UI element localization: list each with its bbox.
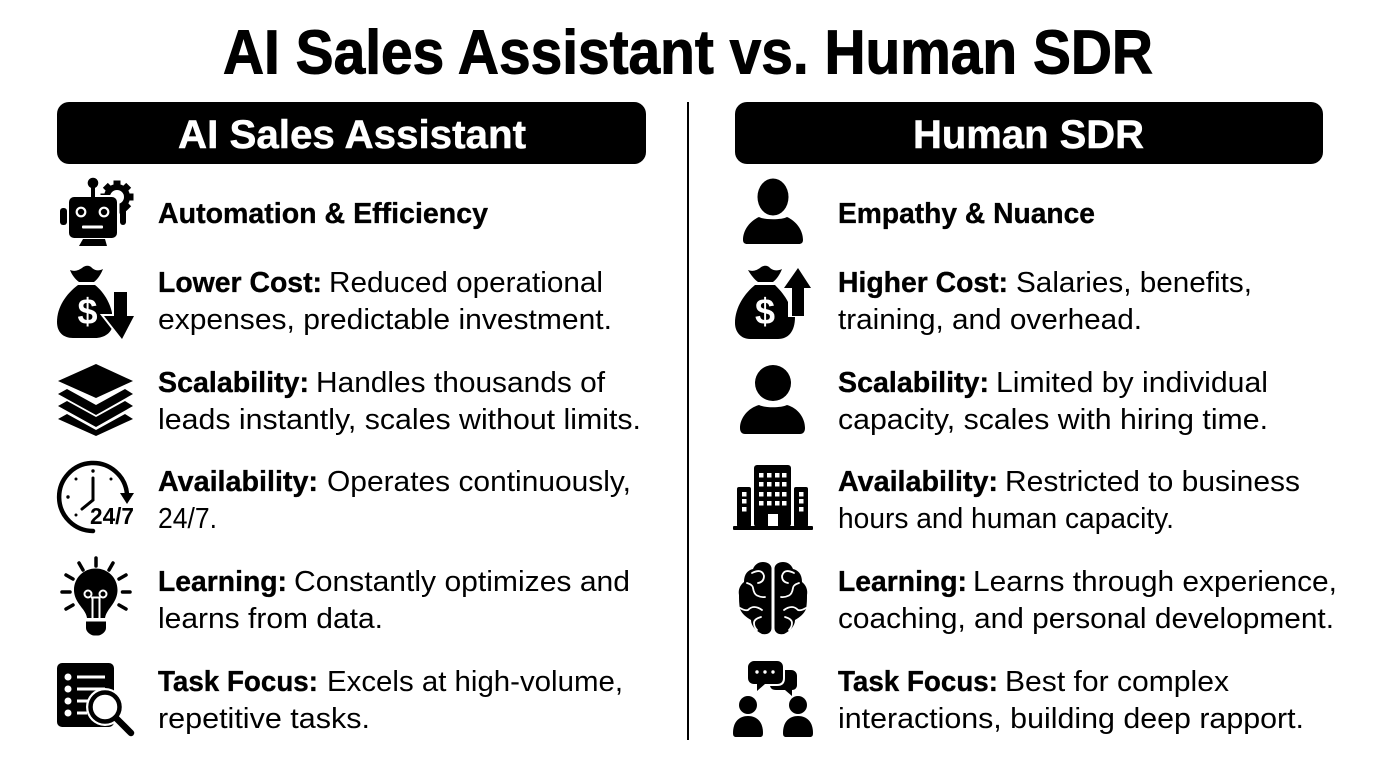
row: higher cost (735, 266, 1252, 339)
icon: clock with 24/7 (59, 463, 134, 531)
text: task focus: Task Focus: (838, 666, 998, 698)
text: availability: hours and human capacity. (838, 503, 1174, 535)
icon: checklist with magnifier (57, 663, 131, 733)
text: task focus: interactions, building deep rapport. (838, 703, 1304, 735)
text: lower cost (158, 267, 612, 336)
text: scalability (158, 367, 641, 436)
heading: AI Sales Assistant (57, 102, 646, 164)
row: learning (62, 558, 630, 636)
text: learning: Learning: (158, 566, 287, 598)
text: learning: coaching, and personal development. (838, 603, 1334, 635)
text: task focus: repetitive tasks. (158, 703, 370, 735)
row: task focus (733, 659, 1304, 737)
text: learning: learns from data. (158, 603, 383, 635)
row: automation and efficiency (60, 178, 488, 246)
text: scalability: Limited by individual (996, 367, 1268, 399)
text: higher cost: Salaries, benefits, (1016, 267, 1252, 299)
icon: money bag with down arrow: $ (77, 291, 98, 332)
icon: person (740, 365, 805, 434)
text: lower cost: Lower Cost: (158, 267, 322, 299)
text: lower cost: expenses, predictable investment. (158, 304, 612, 336)
heading: Human SDR (735, 102, 1323, 164)
row: scalability (58, 364, 641, 436)
title: AI Sales Assistant vs. Human SDR (223, 18, 1153, 88)
icon: clock with 24/7: 24/7 (90, 503, 134, 529)
text: empathy and nuance: Empathy & Nuance (838, 198, 1095, 230)
row: learning (739, 562, 1337, 635)
icon: money bag with down arrow (57, 266, 134, 339)
text: learning (838, 566, 1337, 635)
text: task focus: Best for complex (1005, 666, 1230, 698)
text: learning: Constantly optimizes and (294, 566, 630, 598)
text: task focus (838, 666, 1304, 735)
panel: AI Sales Assistant (57, 102, 646, 735)
icon: stacked layers (58, 364, 133, 436)
icon: robot with gear (60, 178, 134, 246)
text: task focus (158, 666, 623, 735)
text: learning (158, 566, 630, 635)
row: availability (733, 465, 1300, 535)
text: task focus: Task Focus: (158, 666, 318, 698)
row: availability (59, 463, 631, 535)
text: scalability (838, 367, 1268, 436)
text: scalability: Scalability: (158, 367, 309, 399)
text: task focus: Excels at high-volume, (327, 666, 623, 698)
text: availability: Availability: (158, 466, 318, 498)
text: availability (838, 466, 1300, 535)
panel: Human SDR (733, 102, 1337, 737)
row: scalability (740, 365, 1268, 436)
icon: two people talking (733, 659, 813, 737)
icon: light bulb (62, 558, 130, 636)
text: learning: Learning: (838, 566, 967, 598)
text: learning: Learns through experience, (973, 566, 1337, 598)
text: scalability: leads instantly, scales without limits. (158, 404, 641, 436)
text: automation and efficiency: Automation & Efficiency (158, 198, 488, 230)
row: empathy and nuance (743, 178, 1095, 244)
icon: person (743, 178, 803, 244)
text: availability (158, 466, 631, 535)
text: scalability: capacity, scales with hiring time. (838, 404, 1268, 436)
icon: money bag with up arrow: $ (755, 291, 775, 332)
text: availability: Availability: (838, 466, 998, 498)
center divider (687, 102, 689, 740)
text: availability: Restricted to business (1005, 466, 1300, 498)
text: availability: Operates continuously, (327, 466, 631, 498)
text: scalability: Handles thousands of (316, 367, 606, 399)
text: higher cost: Higher Cost: (838, 267, 1008, 299)
icon: money bag with up arrow (735, 266, 811, 339)
heading: AI Sales Assistant: AI Sales Assistant (178, 113, 526, 157)
heading: Human SDR: Human SDR (913, 113, 1144, 157)
icon: brain (739, 562, 807, 634)
icon: office building (733, 465, 813, 530)
text: scalability: Scalability: (838, 367, 989, 399)
row: lower cost (57, 266, 612, 339)
text: higher cost (838, 267, 1252, 336)
text: availability: 24/7. (158, 503, 217, 535)
text: higher cost: training, and overhead. (838, 304, 1142, 336)
text: lower cost: Reduced operational (329, 267, 603, 299)
row: task focus (57, 663, 623, 735)
